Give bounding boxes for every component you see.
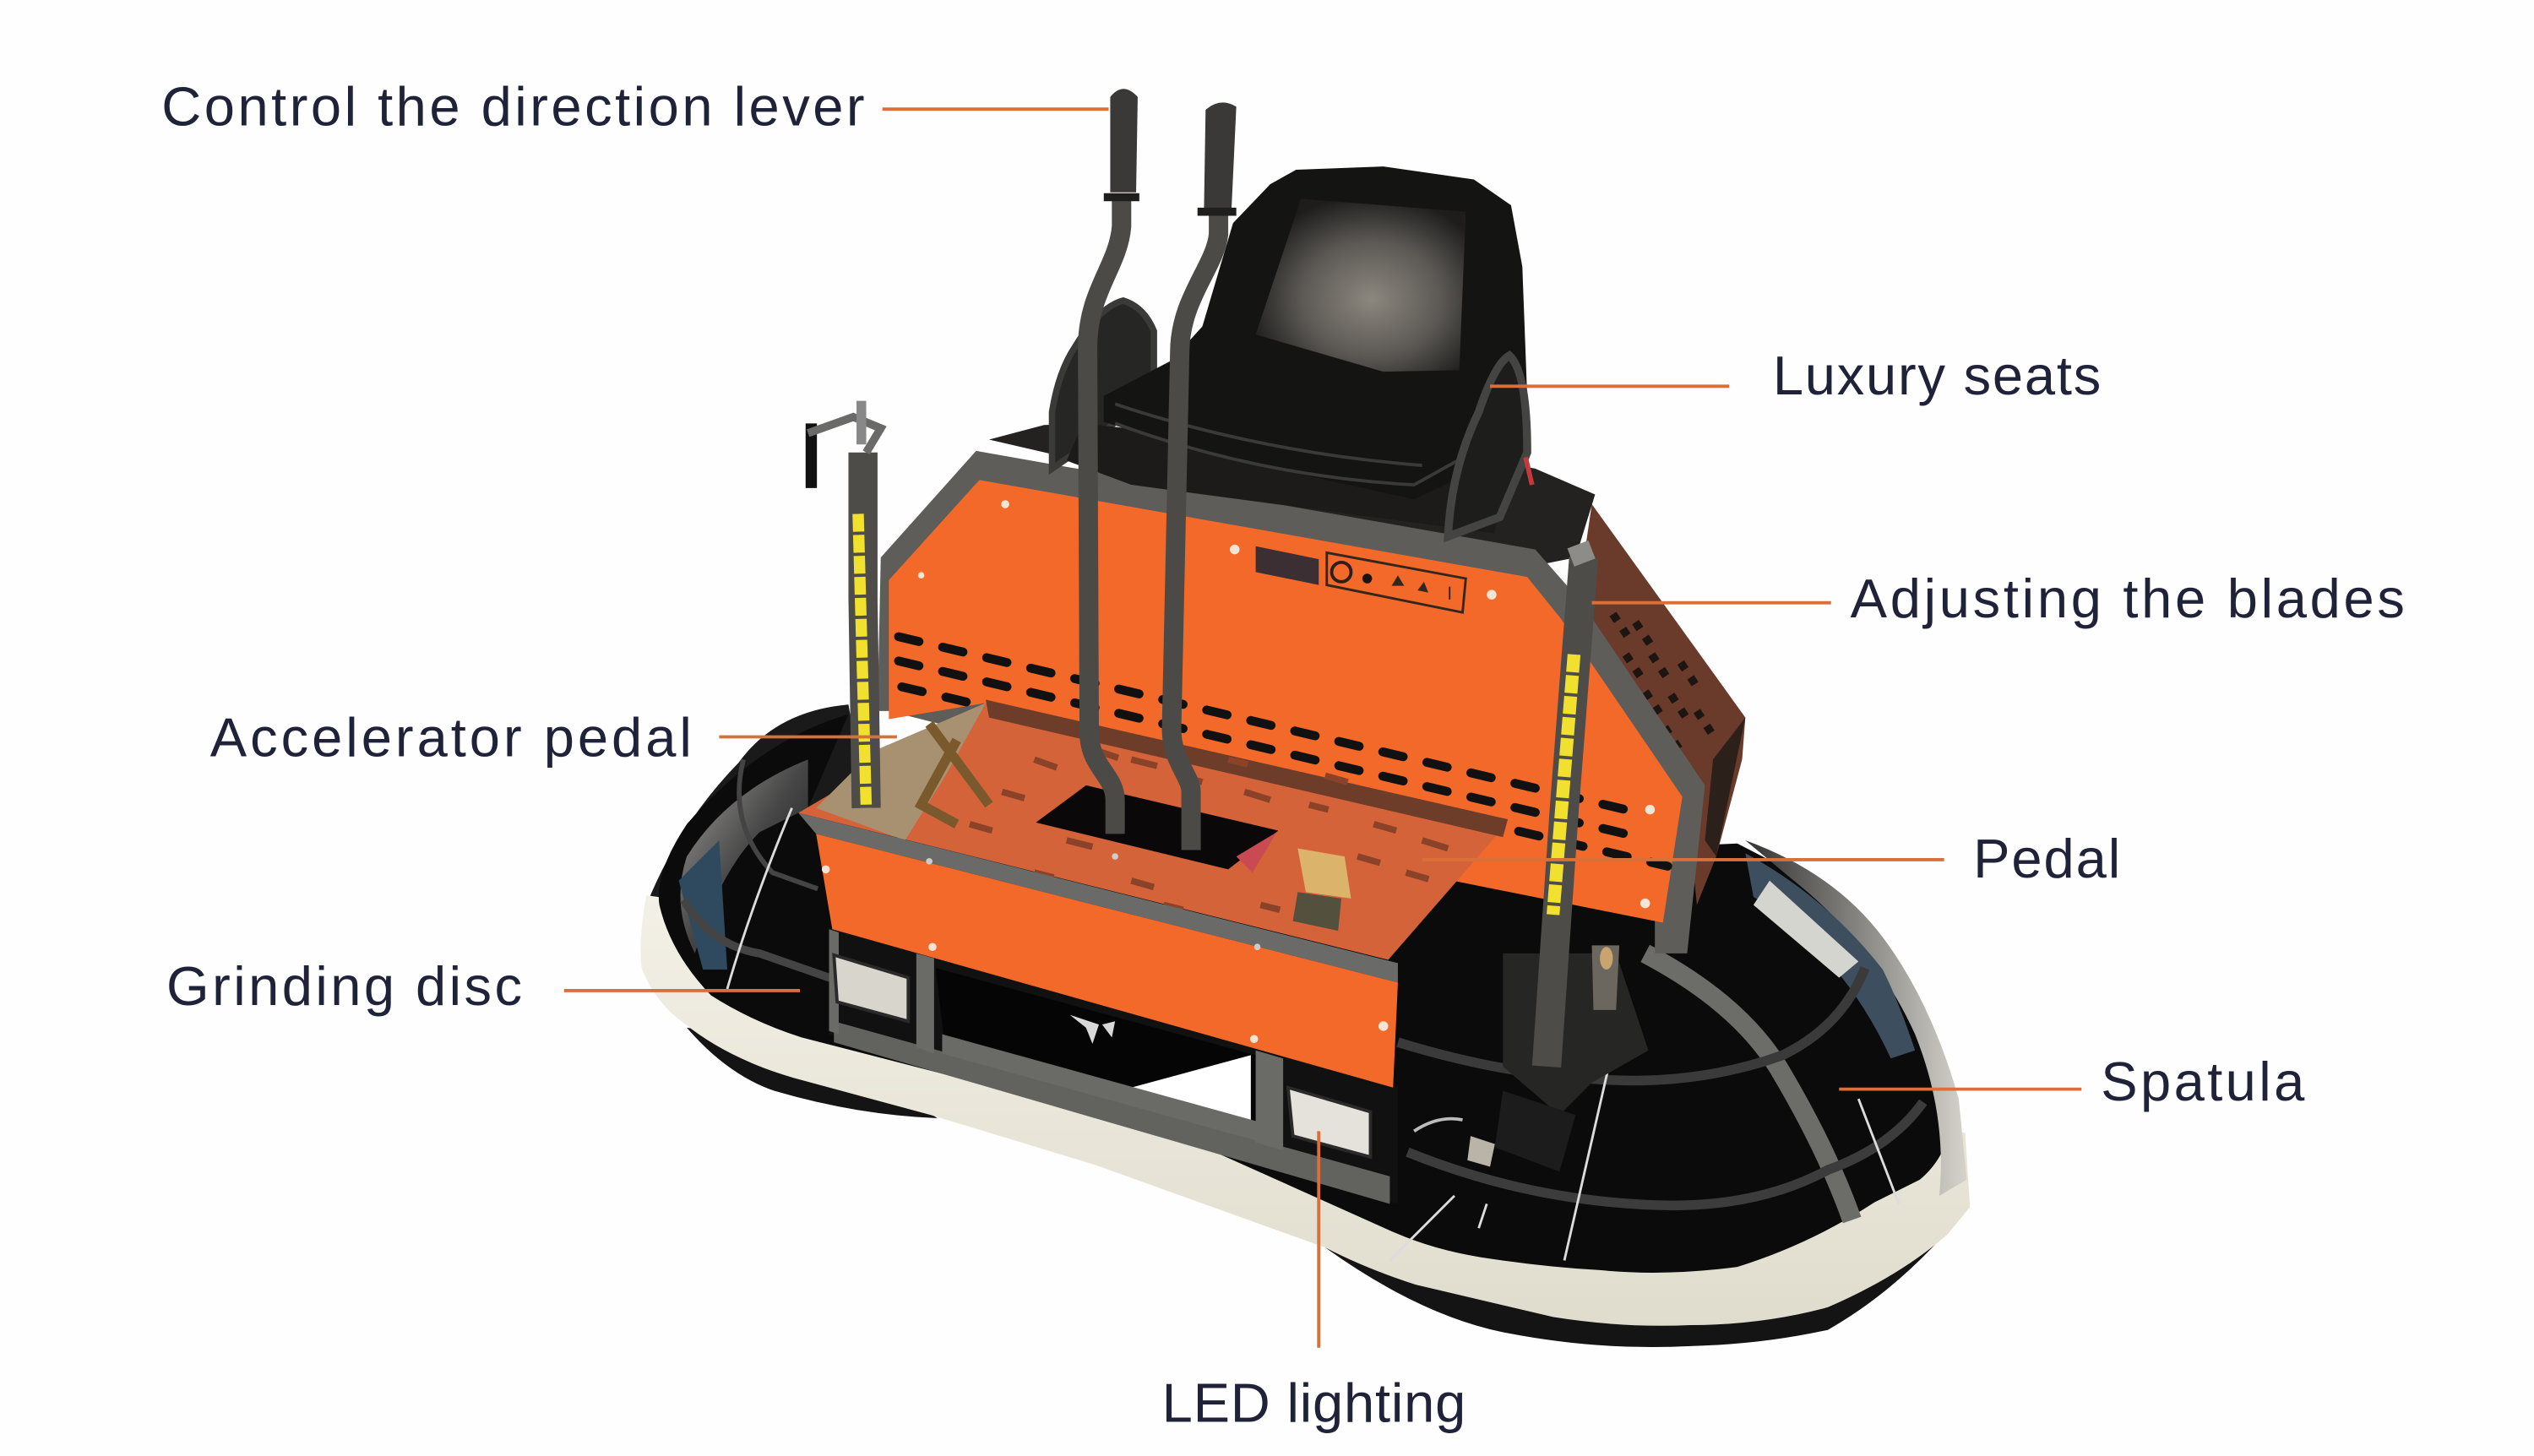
left reflective pedal area xyxy=(816,703,986,840)
opening xyxy=(936,968,1256,1133)
callout: Pedal: Pedal xyxy=(1973,828,2120,889)
right perforated side panel xyxy=(1575,504,1745,905)
backrest xyxy=(1104,166,1527,499)
hole xyxy=(1036,785,1278,869)
right side highlights xyxy=(1745,853,1915,1058)
thin wires xyxy=(727,808,1899,1260)
blade pole right xyxy=(1547,550,1592,1067)
lower frame and opening xyxy=(829,927,1398,1203)
control label xyxy=(1256,546,1465,612)
left armrest xyxy=(1052,301,1154,469)
callout: Control the direction lever: Control the direction lever xyxy=(161,75,865,137)
black lower skirt left xyxy=(687,1028,938,1118)
vent slot dashes xyxy=(899,637,1667,867)
side machinery xyxy=(1503,953,1649,1115)
cream bumper xyxy=(640,895,1970,1326)
callout: Spatula: Spatula xyxy=(2101,1051,2305,1112)
pillars xyxy=(829,929,1283,1150)
seat xyxy=(1052,166,1532,536)
opening lower bar xyxy=(942,1035,1258,1141)
right rim glass xyxy=(1745,840,1966,1196)
machine: ride-on trowel xyxy=(640,89,1970,1347)
cushion folds xyxy=(1115,404,1487,485)
light left xyxy=(834,955,908,1021)
dark interior xyxy=(659,714,1947,1273)
housing grey frame xyxy=(878,451,1705,953)
console top plate xyxy=(798,700,1508,960)
right pedal gold xyxy=(1297,849,1351,899)
callout: Adjusting the blades: Adjusting the blades xyxy=(1851,568,2405,629)
grey arm frame xyxy=(1645,953,1852,1220)
left glass reflection xyxy=(680,759,808,953)
right armrest xyxy=(1448,356,1527,536)
black under panel xyxy=(829,927,1398,1203)
seat base xyxy=(1067,423,1503,533)
console front face xyxy=(798,812,1398,1088)
light right xyxy=(1288,1088,1370,1157)
rivets xyxy=(918,500,1655,908)
upper rim shadow xyxy=(646,704,873,953)
backrest inset xyxy=(1256,198,1465,372)
callout: Grinding disc: Grinding disc xyxy=(166,955,522,1017)
steering lever right xyxy=(1172,102,1237,850)
plate texture xyxy=(970,752,1448,910)
ring arcs right xyxy=(1398,968,1865,1080)
steering lever left xyxy=(1088,89,1139,834)
callout: Accelerator pedal: Accelerator pedal xyxy=(210,706,692,768)
ring arcs left xyxy=(739,759,818,888)
orange panel xyxy=(889,480,1683,923)
black lower skirt right xyxy=(1325,1196,1970,1347)
callout: Luxury seats: Luxury seats xyxy=(1773,345,2101,406)
blade pole left xyxy=(808,401,881,808)
callout: LED lighting: LED lighting xyxy=(1162,1372,1465,1434)
upper housing deck xyxy=(989,423,1595,566)
grey lower bar xyxy=(834,1021,1389,1203)
